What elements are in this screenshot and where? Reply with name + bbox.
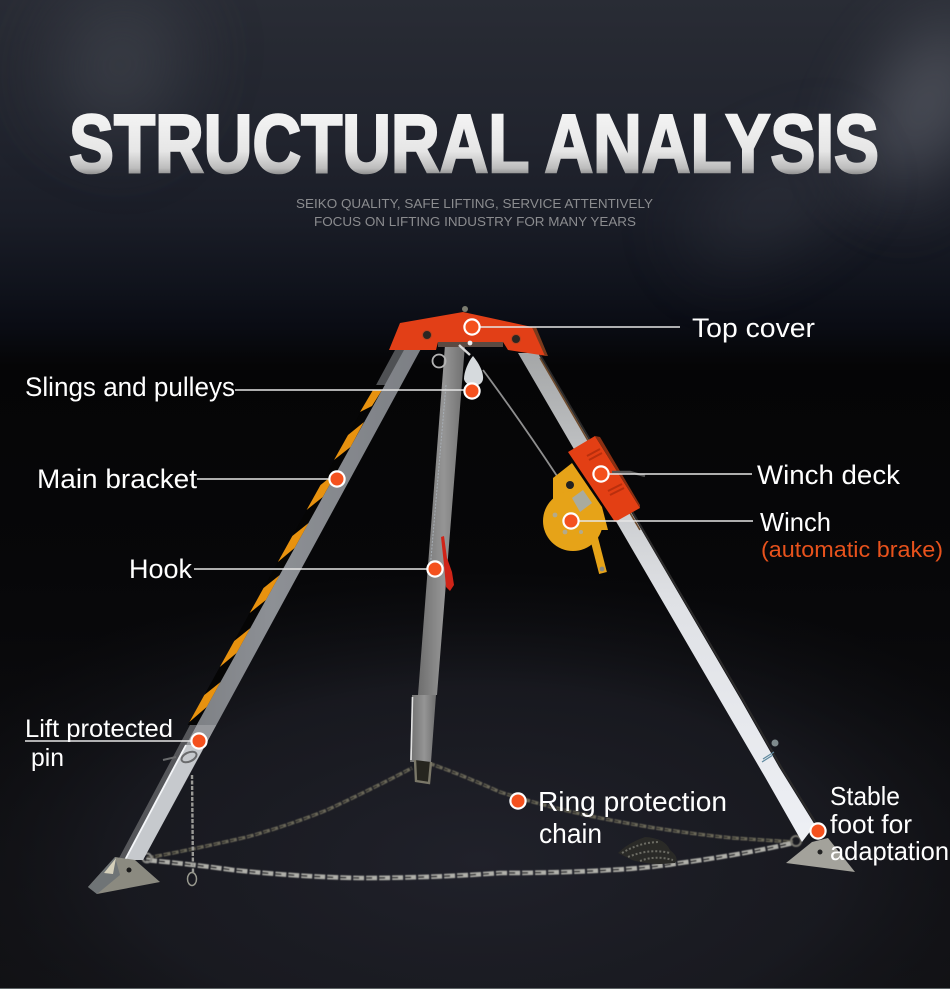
right foot plate bbox=[786, 838, 855, 872]
subtitle bbox=[296, 196, 653, 229]
callout: lift protected pin: pin bbox=[31, 744, 64, 772]
cable bbox=[483, 370, 557, 476]
callout: hook: Hook bbox=[129, 554, 192, 584]
chain pile bbox=[618, 837, 677, 864]
callout: main bracket: Main bracket bbox=[37, 464, 198, 494]
main bracket: left leg bbox=[118, 345, 423, 860]
callout: winch deck: Winch deck bbox=[757, 460, 900, 490]
pin chain bbox=[188, 775, 196, 886]
hazard stripes bbox=[188, 385, 385, 725]
ring protection chain bbox=[142, 763, 801, 878]
winch bbox=[543, 463, 608, 573]
right leg bbox=[518, 353, 817, 842]
callout: ring protection chain bbox=[510, 786, 727, 849]
subtitle: SEIKO QUALITY, SAFE LIFTING, SERVICE ATTENTIVELY bbox=[296, 196, 653, 211]
callout: stable foot: foot for bbox=[830, 809, 912, 839]
callout: winch deck bbox=[593, 460, 900, 490]
callout: lift protected pin bbox=[25, 715, 207, 772]
callout: ring protection chain: Ring protection bbox=[538, 786, 727, 817]
callout: top cover: Top cover bbox=[692, 313, 815, 343]
callout: ring protection chain: chain bbox=[539, 818, 602, 849]
callout: hook bbox=[129, 554, 443, 584]
callout: main bracket bbox=[37, 464, 345, 494]
callout: stable foot: adaptation bbox=[830, 836, 949, 866]
callout: top cover bbox=[464, 313, 815, 343]
centre leg bbox=[410, 345, 465, 783]
top cover bbox=[389, 306, 548, 368]
callout: slings and pulleys bbox=[25, 372, 480, 402]
winch deck bbox=[568, 436, 645, 522]
callout: winch with automatic brake bbox=[563, 507, 943, 562]
slings and pulleys bbox=[459, 341, 483, 386]
red hook bbox=[441, 536, 454, 591]
callout: lift protected pin: Lift protected bbox=[25, 715, 173, 743]
left foot plate bbox=[88, 857, 160, 894]
hanging ring bbox=[432, 354, 446, 368]
callout: stable foot bbox=[810, 781, 949, 866]
callout: stable foot: Stable bbox=[830, 781, 900, 811]
callout: winch with automatic brake: (automatic brake) bbox=[761, 537, 943, 562]
lift pin bbox=[163, 750, 198, 764]
leg bracket bbox=[415, 760, 431, 783]
subtitle: FOCUS ON LIFTING INDUSTRY FOR MANY YEARS bbox=[314, 214, 636, 229]
callout: slings and pulleys: Slings and pulleys bbox=[25, 372, 235, 402]
tripod illustration bbox=[88, 306, 855, 894]
callout: winch with automatic brake: Winch bbox=[760, 507, 831, 537]
